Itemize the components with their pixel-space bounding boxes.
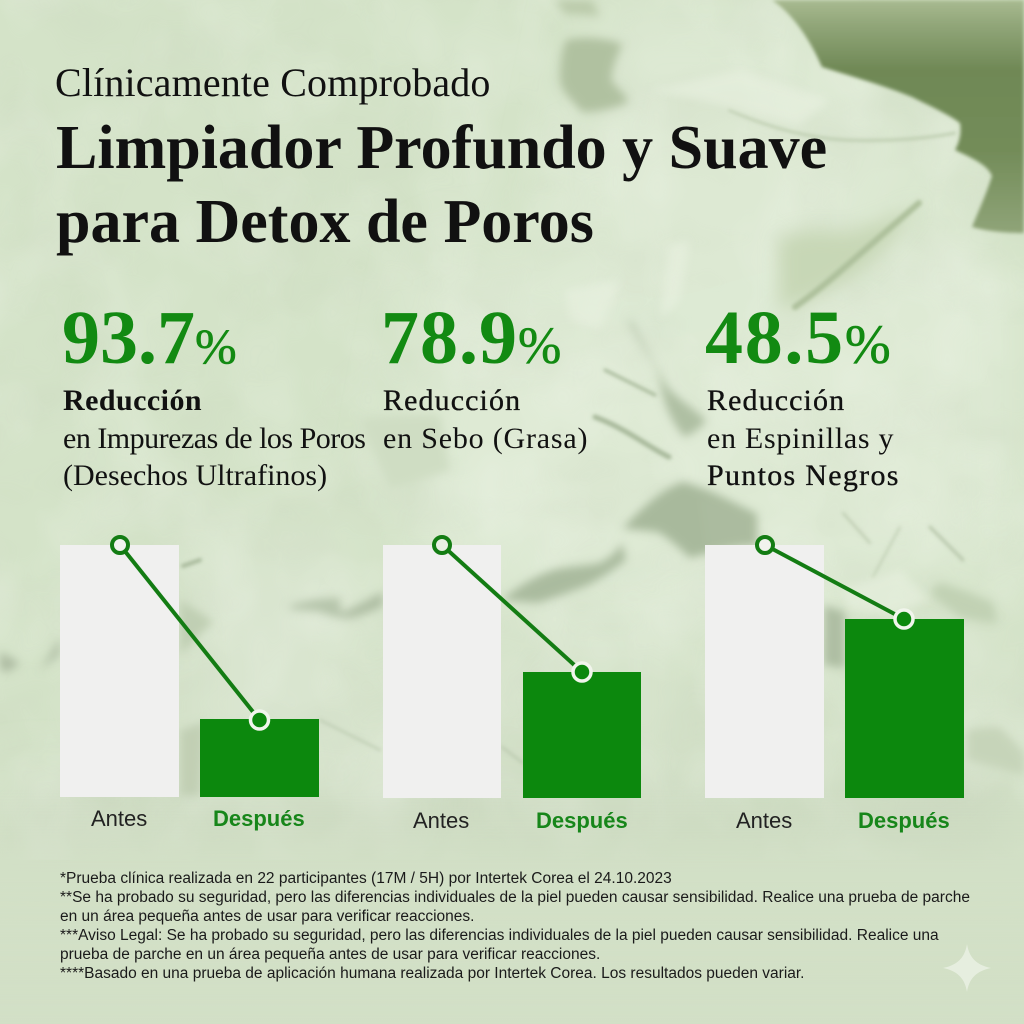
dark backdrop top right <box>772 0 1024 233</box>
main title: para Detox de Poros <box>56 188 594 256</box>
trend line <box>432 535 593 683</box>
label: before: Antes <box>413 808 469 833</box>
description: Puntos Negros <box>707 459 900 492</box>
chart: blackheads <box>705 535 964 833</box>
description: Reducción <box>383 384 521 417</box>
footnotes: prueba de parche en un área pequeña antes de usar para verificar reacciones. <box>60 946 600 963</box>
description <box>63 384 365 492</box>
bar: after <box>523 672 641 798</box>
trend line <box>755 535 915 630</box>
stat: blackheads <box>705 296 900 492</box>
eyebrow heading: Clínicamente Comprobado <box>55 60 491 105</box>
description: Reducción <box>63 384 202 417</box>
label: after: Después <box>536 808 628 833</box>
label: after: Después <box>858 808 950 833</box>
description: (Desechos Ultrafinos) <box>63 459 327 492</box>
main title <box>56 114 827 256</box>
value 78.9%: 78.9% <box>381 296 561 380</box>
footnotes: en un área pequeña antes de usar para verificar reacciones. <box>60 908 474 925</box>
footnotes <box>60 870 970 982</box>
description: en Impurezas de los Poros <box>63 422 365 454</box>
trend line <box>110 535 270 731</box>
icon: sparkle <box>944 945 990 991</box>
value 93.7%: 93.7% <box>62 296 237 380</box>
main title: Limpiador Profundo y Suave <box>56 114 827 182</box>
clay cracks and ridges <box>183 110 963 763</box>
bottom fade <box>0 790 1024 1024</box>
footnotes: **Se ha probado su seguridad, pero las diferencias individuales de la piel pueden causar sensibilidad. Realice una prueba de parche <box>60 889 970 906</box>
footnotes: ***Aviso Legal: Se ha probado su seguridad, pero las diferencias individuales de la piel pueden causar sensibilidad. Realice una <box>60 927 939 944</box>
footnotes: *Prueba clínica realizada en 22 participantes (17M / 5H) por Intertek Corea el 24.10.2023 <box>60 870 672 887</box>
description <box>707 384 900 492</box>
label: after: Después <box>213 806 305 831</box>
bar: before <box>705 545 824 798</box>
bar: before <box>60 545 179 797</box>
soft shadow below the clay flap <box>779 203 919 310</box>
footnotes: ****Basado en una prueba de aplicación humana realizada por Intertek Corea. Los resultados pueden variar. <box>60 965 804 982</box>
chart: impurities <box>60 535 319 831</box>
bar: after <box>845 619 964 798</box>
description <box>383 384 588 454</box>
chart: sebum <box>383 535 641 833</box>
label: before: Antes <box>91 806 147 831</box>
stat: impurities <box>62 296 365 492</box>
description: en Sebo (Grasa) <box>383 422 588 454</box>
label: before: Antes <box>736 808 792 833</box>
bar: after <box>200 719 319 797</box>
value 48.5%: 48.5% <box>705 296 891 380</box>
bar: before <box>383 545 501 798</box>
description: en Espinillas y <box>707 422 894 454</box>
description: Reducción <box>707 384 845 417</box>
stat: sebum <box>381 296 588 454</box>
clay highlights <box>565 70 930 615</box>
clay shadows <box>0 0 1024 796</box>
